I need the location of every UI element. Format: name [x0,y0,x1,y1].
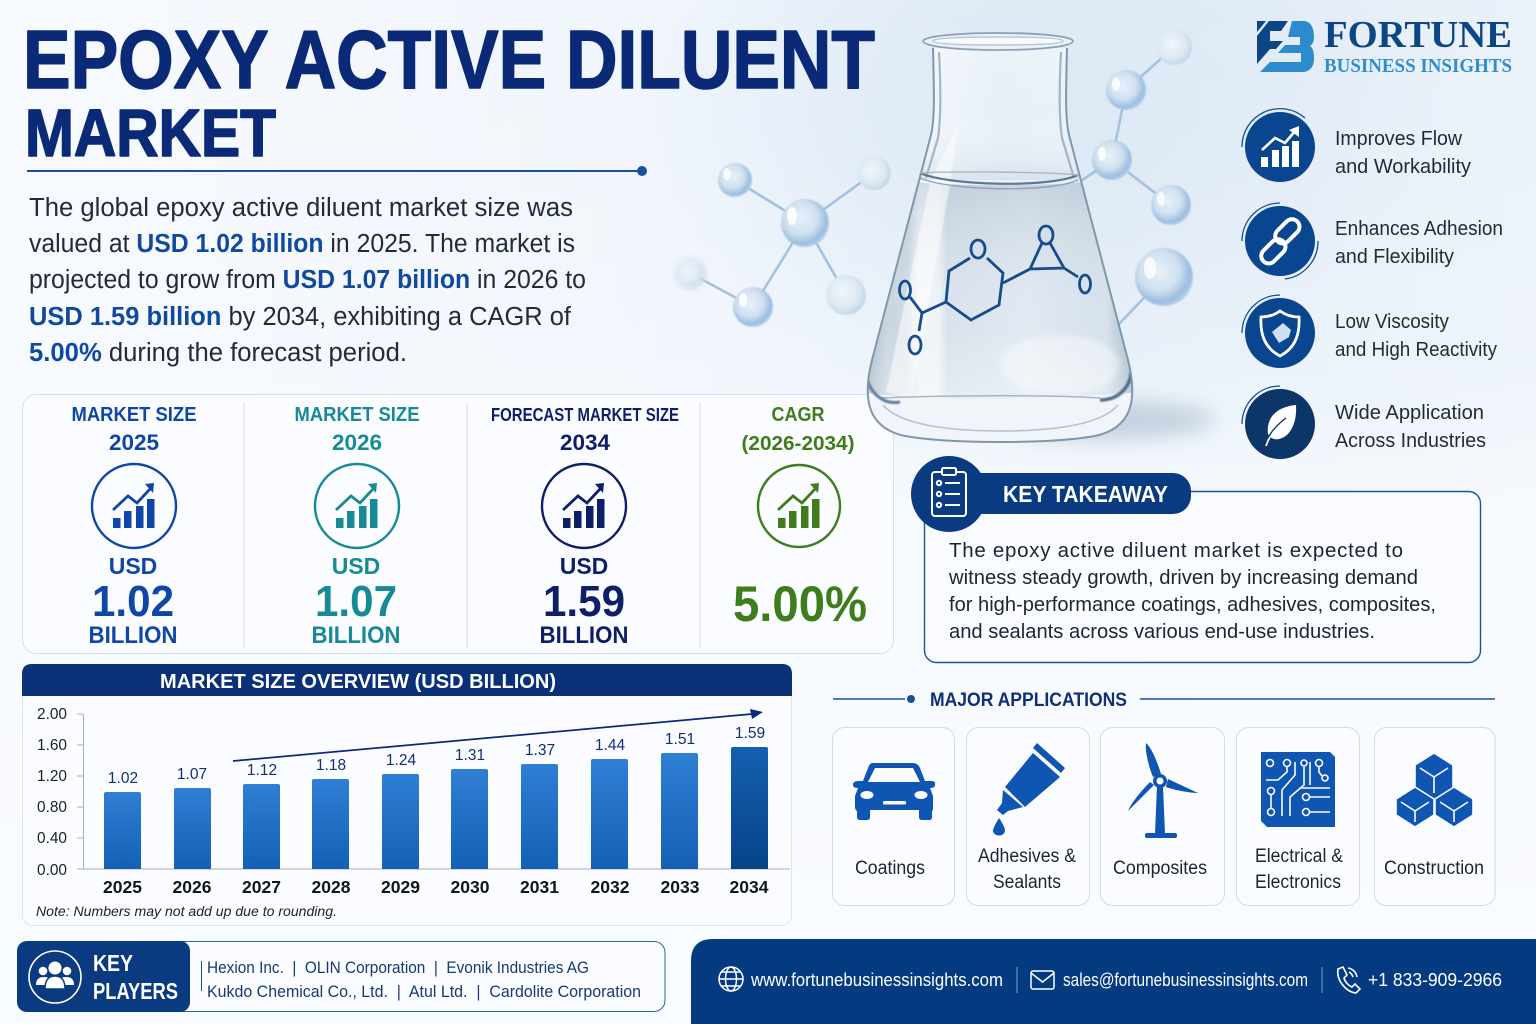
intro paragraph: projected to grow from USD 1.07 billion in 2026 to [29,266,586,294]
icon: wind turbine [1128,743,1198,838]
flask rim [923,33,1073,50]
title [23,13,875,171]
logo: BUSINESS INSIGHTS [1324,55,1512,77]
stat: market size 2026: BILLION [312,622,400,649]
application: composites [1100,728,1224,906]
key takeaway header pill: KEY TAKEAWAY [1003,481,1168,507]
application: construction: Construction [1384,858,1484,879]
bar value labels: 1.37 [525,742,555,759]
chart header [22,664,792,696]
stat: market size 2026: MARKET SIZE [294,404,420,426]
intro paragraph [29,194,586,367]
year labels: 2027 [242,877,281,897]
benefit: low viscosity: and High Reactivity [1335,338,1498,361]
icon: people [29,951,81,1003]
benefit: improves flow [1242,109,1472,182]
benefit: low viscosity [1242,295,1498,368]
footer contact bar: www.fortunebusinessinsights.com [750,970,1003,990]
panel: key stats [22,394,894,654]
bar value labels: 1.24 [386,752,416,769]
bar value labels: 1.07 [177,766,207,783]
key players list [207,959,641,1001]
stat: market size 2025: BILLION [88,622,178,649]
year labels [103,877,769,897]
trend arrow [233,709,763,761]
key takeaway text: The epoxy active diluent market is expected to [949,539,1403,562]
bar value labels: 1.44 [595,737,625,754]
stat: market size 2026 [294,404,420,649]
background molecules right [1075,29,1193,325]
application: coatings [832,728,954,906]
icon: car [853,763,935,820]
intro paragraph: valued at USD 1.02 billion in 2025. The market is [29,230,575,258]
logo: FORTUNE [1324,14,1512,56]
benefit: wide application: Across Industries [1335,429,1486,452]
flask shadow [995,400,1215,440]
y axis: 1.20 [37,768,67,785]
panel: key players: PLAYERS [93,978,178,1004]
footer contact bar: sales@fortunebusinessinsights.com [1063,970,1308,990]
bar value labels: 1.02 [108,770,138,787]
stat: CAGR: CAGR [772,403,825,426]
key players list: Kukdo Chemical Co., Ltd. | Atul Ltd. | Cardolite Corporation [207,983,641,1001]
stat: market size 2025: USD [109,553,157,579]
year labels: 2028 [312,877,351,897]
stat: forecast market size 2034: USD [560,553,608,579]
application: electrical and electronics [1236,728,1360,906]
stat: CAGR: 5.00% [733,576,867,632]
bars [104,747,768,869]
benefit: enhances adhesion: Enhances Adhesion [1335,217,1503,240]
logo mark [1257,21,1314,72]
benefit: improves flow: Improves Flow [1335,127,1462,150]
year labels: 2029 [381,877,420,897]
application: electrical and electronics: Electrical & [1255,846,1343,867]
panel: key takeaway [911,456,1480,662]
y axis: 0.40 [37,830,67,847]
stat: market size 2025 [72,404,196,649]
bar value labels: 1.12 [247,762,277,779]
molecule drawing [900,226,1090,354]
stat: market size 2025: 2025 [109,430,159,455]
footer contact bar [691,939,1536,1024]
icon: phone [1338,967,1360,993]
year labels: 2026 [173,877,212,897]
key takeaway header pill [911,456,1191,532]
bar value labels: 1.59 [735,725,765,742]
major applications heading [833,689,1495,711]
key takeaway text: for high-performance coatings, adhesives, composites, [949,593,1436,616]
year labels: 2033 [661,877,700,897]
icon: glue tube [993,743,1065,836]
y axis [37,706,790,879]
panel: key players: KEY [93,950,133,976]
year labels: 2031 [520,877,559,897]
logo [1257,14,1512,77]
stat: CAGR: (2026-2034) [742,432,854,455]
bar value labels: 1.18 [316,757,346,774]
chart note: Note: Numbers may not add up due to rounding. [36,904,337,919]
intro paragraph: USD 1.59 billion by 2034, exhibiting a CAGR of [29,303,572,331]
application: adhesives and sealants: Sealants [993,872,1061,893]
bar value labels: 1.51 [665,731,695,748]
application: coatings: Coatings [855,858,925,879]
year labels: 2034 [730,877,769,897]
stat: forecast market size 2034: BILLION [540,622,628,649]
stat: market size 2026: 1.07 [315,577,397,626]
major applications heading: MAJOR APPLICATIONS [930,689,1127,711]
background molecules left [674,156,891,327]
application: construction [1374,728,1495,906]
stat: CAGR [733,403,867,632]
year labels: 2030 [451,877,490,897]
stat: forecast market size 2034: 2034 [560,430,611,455]
stat: forecast market size 2034 [491,404,679,649]
y axis: 1.60 [37,737,67,754]
benefit: enhances adhesion: and Flexibility [1335,245,1455,268]
flask with molecule [860,33,1140,450]
benefit: wide application [1242,386,1486,459]
stat: market size 2026: 2026 [332,430,382,455]
title: MARKET [25,96,276,171]
y axis: 2.00 [37,706,67,723]
bar value labels [108,725,765,787]
year labels: 2032 [591,877,630,897]
key takeaway text: and sealants across various end-use industries. [949,620,1375,643]
flask thick glass base [868,392,1132,436]
application: composites: Composites [1113,858,1207,879]
stat: forecast market size 2034: FORECAST MARKET SIZE [491,404,679,425]
intro paragraph: The global epoxy active diluent market size was [29,194,573,222]
y axis: 0.80 [37,799,67,816]
application: electrical and electronics: Electronics [1255,872,1341,893]
bar value labels: 1.31 [455,747,485,764]
stat: market size 2025: 1.02 [92,577,174,626]
icon: stacked cubes [1396,753,1473,827]
application: adhesives and sealants [966,728,1090,906]
benefit: low viscosity: Low Viscosity [1335,310,1450,333]
footer contact bar: +1 833-909-2966 [1368,970,1502,990]
panel: key players [17,941,665,1012]
chart header: MARKET SIZE OVERVIEW (USD BILLION) [160,670,556,693]
y axis: 0.00 [37,862,67,879]
benefit: enhances adhesion [1242,203,1503,279]
title: EPOXY ACTIVE DILUENT [23,13,875,106]
application: adhesives and sealants: Adhesives & [978,846,1076,867]
benefit: wide application: Wide Application [1335,401,1484,424]
icon: globe [719,967,743,991]
icon: mail [1031,971,1054,989]
key takeaway text: witness steady growth, driven by increasing demand [948,566,1418,589]
intro paragraph: 5.00% during the forecast period. [29,339,407,367]
icon: circuit board [1261,752,1335,827]
stat: market size 2026: USD [332,553,380,579]
stat: forecast market size 2034: 1.59 [543,577,625,626]
key players list: Hexion Inc. | OLIN Corporation | Evonik Industries AG [207,959,589,977]
key takeaway text [948,539,1436,643]
stat: market size 2025: MARKET SIZE [72,404,196,426]
panel: bar chart market size overview [22,664,792,926]
title underline [27,166,647,176]
benefit: improves flow: and Workability [1335,155,1472,178]
year labels: 2025 [103,877,142,897]
